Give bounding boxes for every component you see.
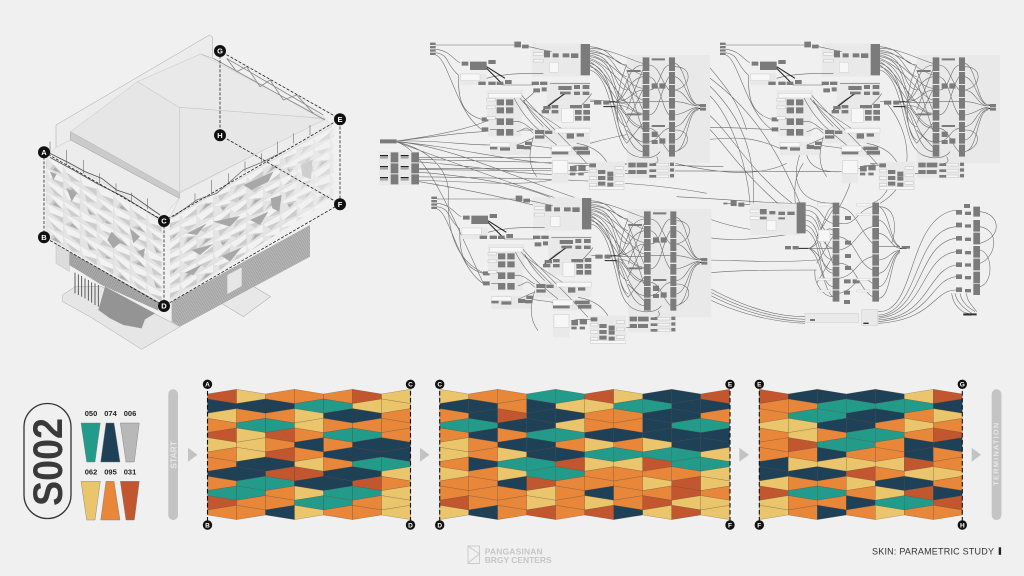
marker G: G	[217, 47, 223, 56]
caption end mark	[999, 547, 1001, 555]
marker B	[38, 231, 50, 243]
panel marker G	[958, 380, 967, 389]
panel 3: pattern E-F to G-H	[759, 389, 962, 520]
swatch 031 red: 031	[124, 468, 136, 476]
front truss left	[50, 153, 160, 218]
panel marker C left	[406, 380, 415, 389]
marker G	[214, 45, 226, 57]
panel marker F left: F	[728, 522, 732, 529]
panel marker C right: C	[437, 382, 442, 389]
arrow panel 2 to panel 3	[739, 448, 749, 462]
marker E: E	[337, 115, 343, 124]
panel marker F right	[755, 520, 764, 530]
panel marker H	[958, 520, 967, 530]
panel marker F right: F	[757, 522, 761, 529]
panel marker D left: D	[408, 522, 413, 529]
panel marker C left: C	[408, 382, 413, 389]
start bar	[168, 389, 179, 520]
panel marker E left	[725, 380, 735, 389]
swatch 050 teal: 050	[85, 409, 97, 418]
termination bar: TERMINATION	[992, 423, 1001, 486]
ground floor left pier	[56, 243, 69, 272]
panel marker B	[203, 520, 212, 530]
marker D: D	[161, 302, 167, 311]
left input block	[379, 139, 419, 185]
node module top right	[720, 42, 1000, 190]
panel marker E right	[755, 380, 764, 389]
panel marker D right: D	[437, 522, 442, 529]
logo wordmark: BRGY CENTERS	[485, 555, 552, 565]
front rail posts and truss	[50, 125, 310, 209]
arrow start to panel 1	[188, 448, 198, 462]
back parapet wall	[56, 35, 213, 149]
arrow panel 1 to panel 2	[420, 448, 430, 462]
panel marker E left: E	[728, 382, 733, 389]
termination bar	[992, 389, 1001, 520]
parametric node graph	[379, 42, 1000, 344]
front truss right	[173, 152, 283, 217]
ground floor left wall	[69, 252, 158, 311]
ground slab	[63, 287, 180, 349]
marker D	[158, 300, 170, 312]
marker A	[38, 146, 50, 158]
marker H: H	[217, 131, 223, 140]
marker F: F	[338, 200, 343, 209]
ID badge S002: S002	[24, 418, 71, 506]
panel 2: pattern C-D to E-F	[440, 389, 730, 520]
marker F	[334, 198, 346, 210]
node module bottom left	[431, 196, 711, 344]
footer logo	[468, 546, 552, 565]
logo wordmark: PANGASINAN	[485, 546, 543, 556]
swatch 062 yellow: 062	[85, 468, 97, 476]
marker A: A	[41, 148, 47, 157]
marker C: C	[161, 217, 167, 226]
ground floor right wall	[172, 225, 310, 327]
arrow panel 3 to termination	[972, 448, 981, 462]
panel corner markers	[203, 380, 967, 530]
right facade skin	[170, 128, 333, 302]
global wires	[397, 60, 907, 323]
logo icon	[468, 546, 480, 564]
swatch 074 navy: 074	[104, 409, 118, 418]
marker H	[214, 129, 226, 141]
panel marker H: H	[960, 522, 965, 529]
colour legend swatches	[81, 409, 139, 520]
swatch 006 grey: 006	[124, 409, 136, 418]
panel marker C right	[435, 380, 444, 389]
marker C	[158, 215, 170, 227]
panel marker A	[203, 380, 212, 389]
right roof deck	[168, 118, 332, 220]
node module top left	[430, 42, 710, 190]
isometric building with facade skin	[46, 35, 333, 349]
panel marker B: B	[205, 522, 210, 529]
ground floor right pier	[227, 267, 242, 294]
panel marker G: G	[960, 382, 965, 389]
left facade panels	[46, 157, 162, 302]
panel marker D left	[406, 520, 415, 530]
panel marker F left	[725, 520, 735, 530]
building markers A to H	[38, 45, 346, 312]
node module bottom right	[723, 200, 996, 325]
dashed skin boundary lines	[44, 51, 340, 306]
entrance gate	[75, 273, 98, 307]
panel marker D right	[435, 520, 444, 530]
panel marker A: A	[205, 382, 210, 389]
rear truss	[213, 58, 325, 120]
left roof deck	[50, 140, 179, 217]
side step slab	[222, 286, 271, 317]
marker B: B	[41, 233, 47, 242]
panel 1: pattern A-B to C-D	[208, 389, 410, 520]
marker E	[334, 113, 346, 125]
paved shadow	[98, 287, 155, 328]
roof edge band	[71, 132, 179, 198]
hip roof	[71, 54, 325, 192]
panel marker E right: E	[757, 382, 762, 389]
swatch 095 orange: 095	[104, 468, 117, 476]
start bar: START	[169, 440, 179, 469]
footer caption: SKIN: PARAMETRIC STUDY	[872, 546, 994, 556]
